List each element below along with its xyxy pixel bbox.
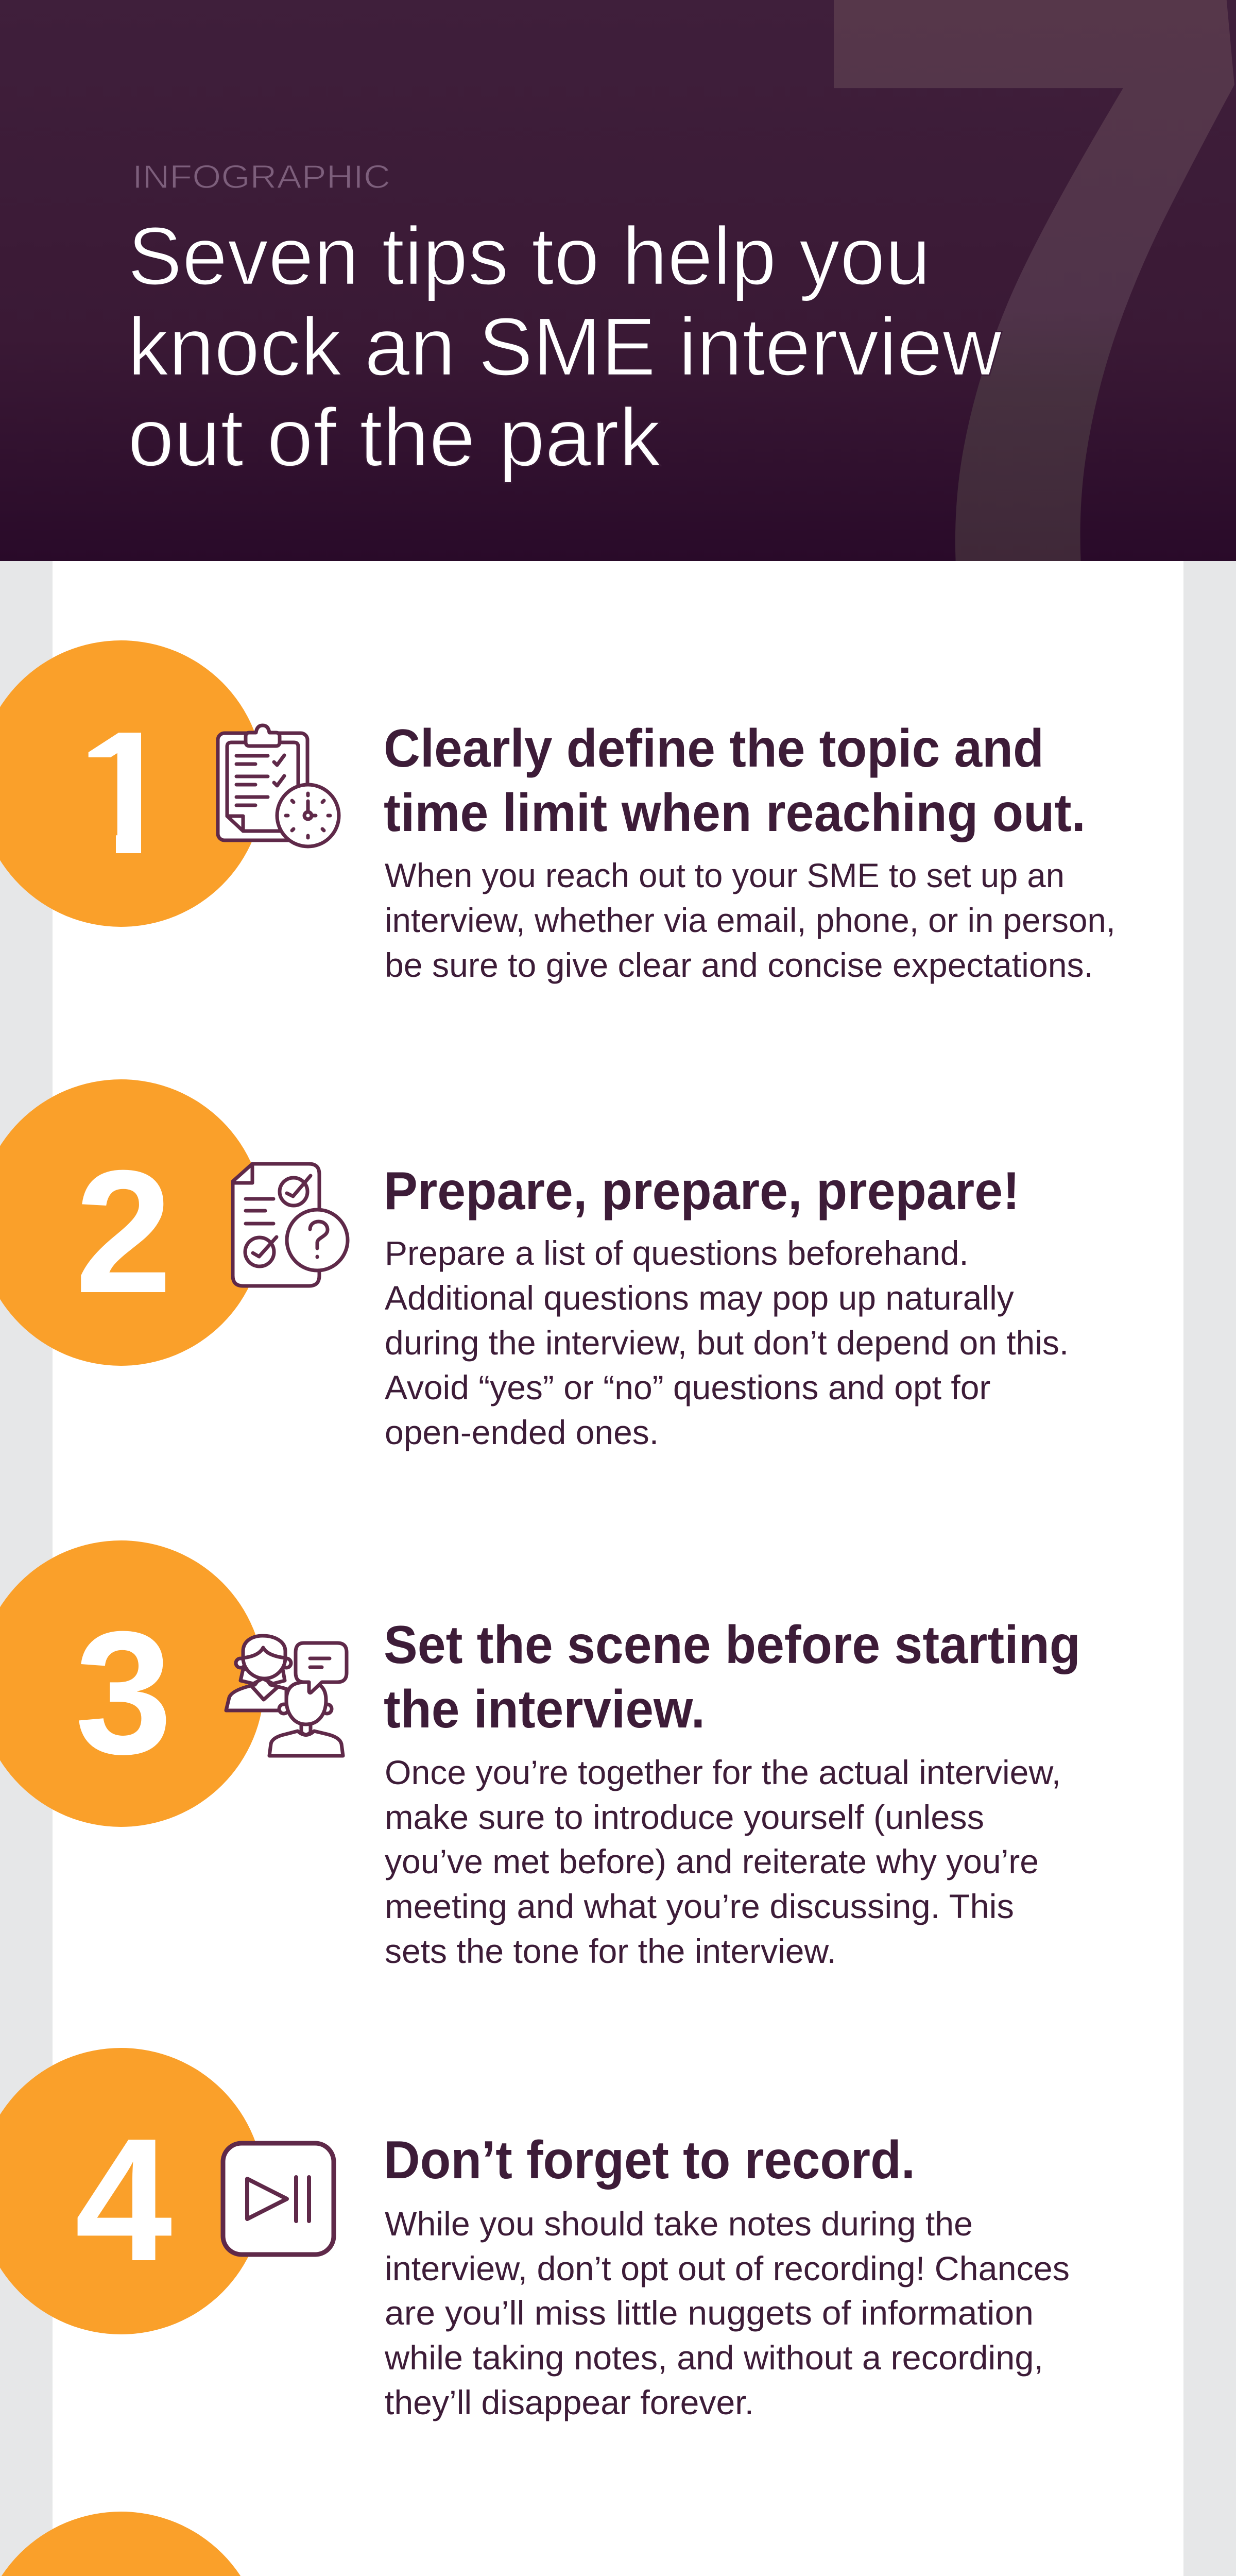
body text: interview, whether via email, phone, or in person,: [385, 901, 1115, 939]
tip 5: [0, 2512, 1121, 2576]
header banner: [0, 0, 1236, 561]
heading: Set the scene before starting: [384, 1615, 1080, 1675]
number badge 4: [0, 2048, 264, 2334]
body text: while taking notes, and without a recording,: [384, 2338, 1043, 2377]
body text: Prepare a list of questions beforehand.: [385, 1234, 969, 1272]
heading: Prepare, prepare, prepare!: [384, 1161, 1020, 1221]
icon: two people talking: [226, 1636, 347, 1756]
body text: interview, don’t opt out of recording! Chances: [385, 2249, 1070, 2287]
title: Seven tips to help you: [128, 210, 931, 302]
body text: meeting and what you’re discussing. This: [385, 1887, 1014, 1925]
heading: time limit when reaching out.: [384, 783, 1086, 843]
body text: Avoid “yes” or “no” questions and opt for: [385, 1368, 990, 1406]
body text: While you should take notes during the: [385, 2205, 973, 2243]
heading: [384, 719, 1086, 843]
heading: Clearly define the topic and: [384, 719, 1044, 778]
white content panel: [53, 561, 1183, 2576]
tip 1: [0, 640, 1115, 984]
heading: [384, 1615, 1080, 1739]
body text: open-ended ones.: [385, 1413, 659, 1451]
number badge 3: 3: [75, 1595, 173, 1791]
title: [128, 210, 1002, 483]
number badge 1: [0, 640, 264, 927]
title: out of the park: [128, 391, 661, 483]
body text: during the interview, but don’t depend on this.: [385, 1324, 1069, 1362]
body text: [384, 2205, 1070, 2421]
body text: you’ve met before) and reiterate why you’re: [385, 1842, 1039, 1880]
icon: clipboard with clock: [218, 725, 339, 846]
body text: Once you’re together for the actual interview,: [385, 1753, 1061, 1791]
eyebrow label: INFOGRAPHIC: [132, 158, 390, 195]
body text: they’ll disappear forever.: [385, 2383, 754, 2421]
body text: [385, 856, 1115, 984]
number badge 2: 2: [75, 1134, 173, 1330]
body text: [385, 1753, 1061, 1970]
number badge 3: [0, 1540, 264, 1827]
body text: sets the tone for the interview.: [385, 1932, 836, 1970]
body text: make sure to introduce yourself (unless: [385, 1798, 984, 1836]
title: knock an SME interview: [128, 300, 1002, 393]
body text: When you reach out to your SME to set up an: [385, 856, 1065, 894]
tip 3: [0, 1540, 1080, 1970]
number badge 1: 1: [76, 695, 174, 891]
heading: Don’t forget to record.: [384, 2130, 915, 2190]
body text: be sure to give clear and concise expectations.: [385, 946, 1093, 984]
number badge 5: [0, 2512, 264, 2576]
number badge 4: 4: [75, 2102, 174, 2298]
tip 2: [0, 1079, 1069, 1451]
body text: [385, 1234, 1069, 1451]
heading: the interview.: [384, 1680, 705, 1739]
icon: checklist with question mark: [233, 1164, 348, 1286]
number badge 2: [0, 1079, 264, 1366]
body text: are you’ll miss little nuggets of information: [385, 2294, 1034, 2332]
icon: play pause button: [223, 2143, 334, 2255]
body text: Additional questions may pop up naturally: [385, 1279, 1014, 1317]
tip 4: [0, 2048, 1070, 2421]
